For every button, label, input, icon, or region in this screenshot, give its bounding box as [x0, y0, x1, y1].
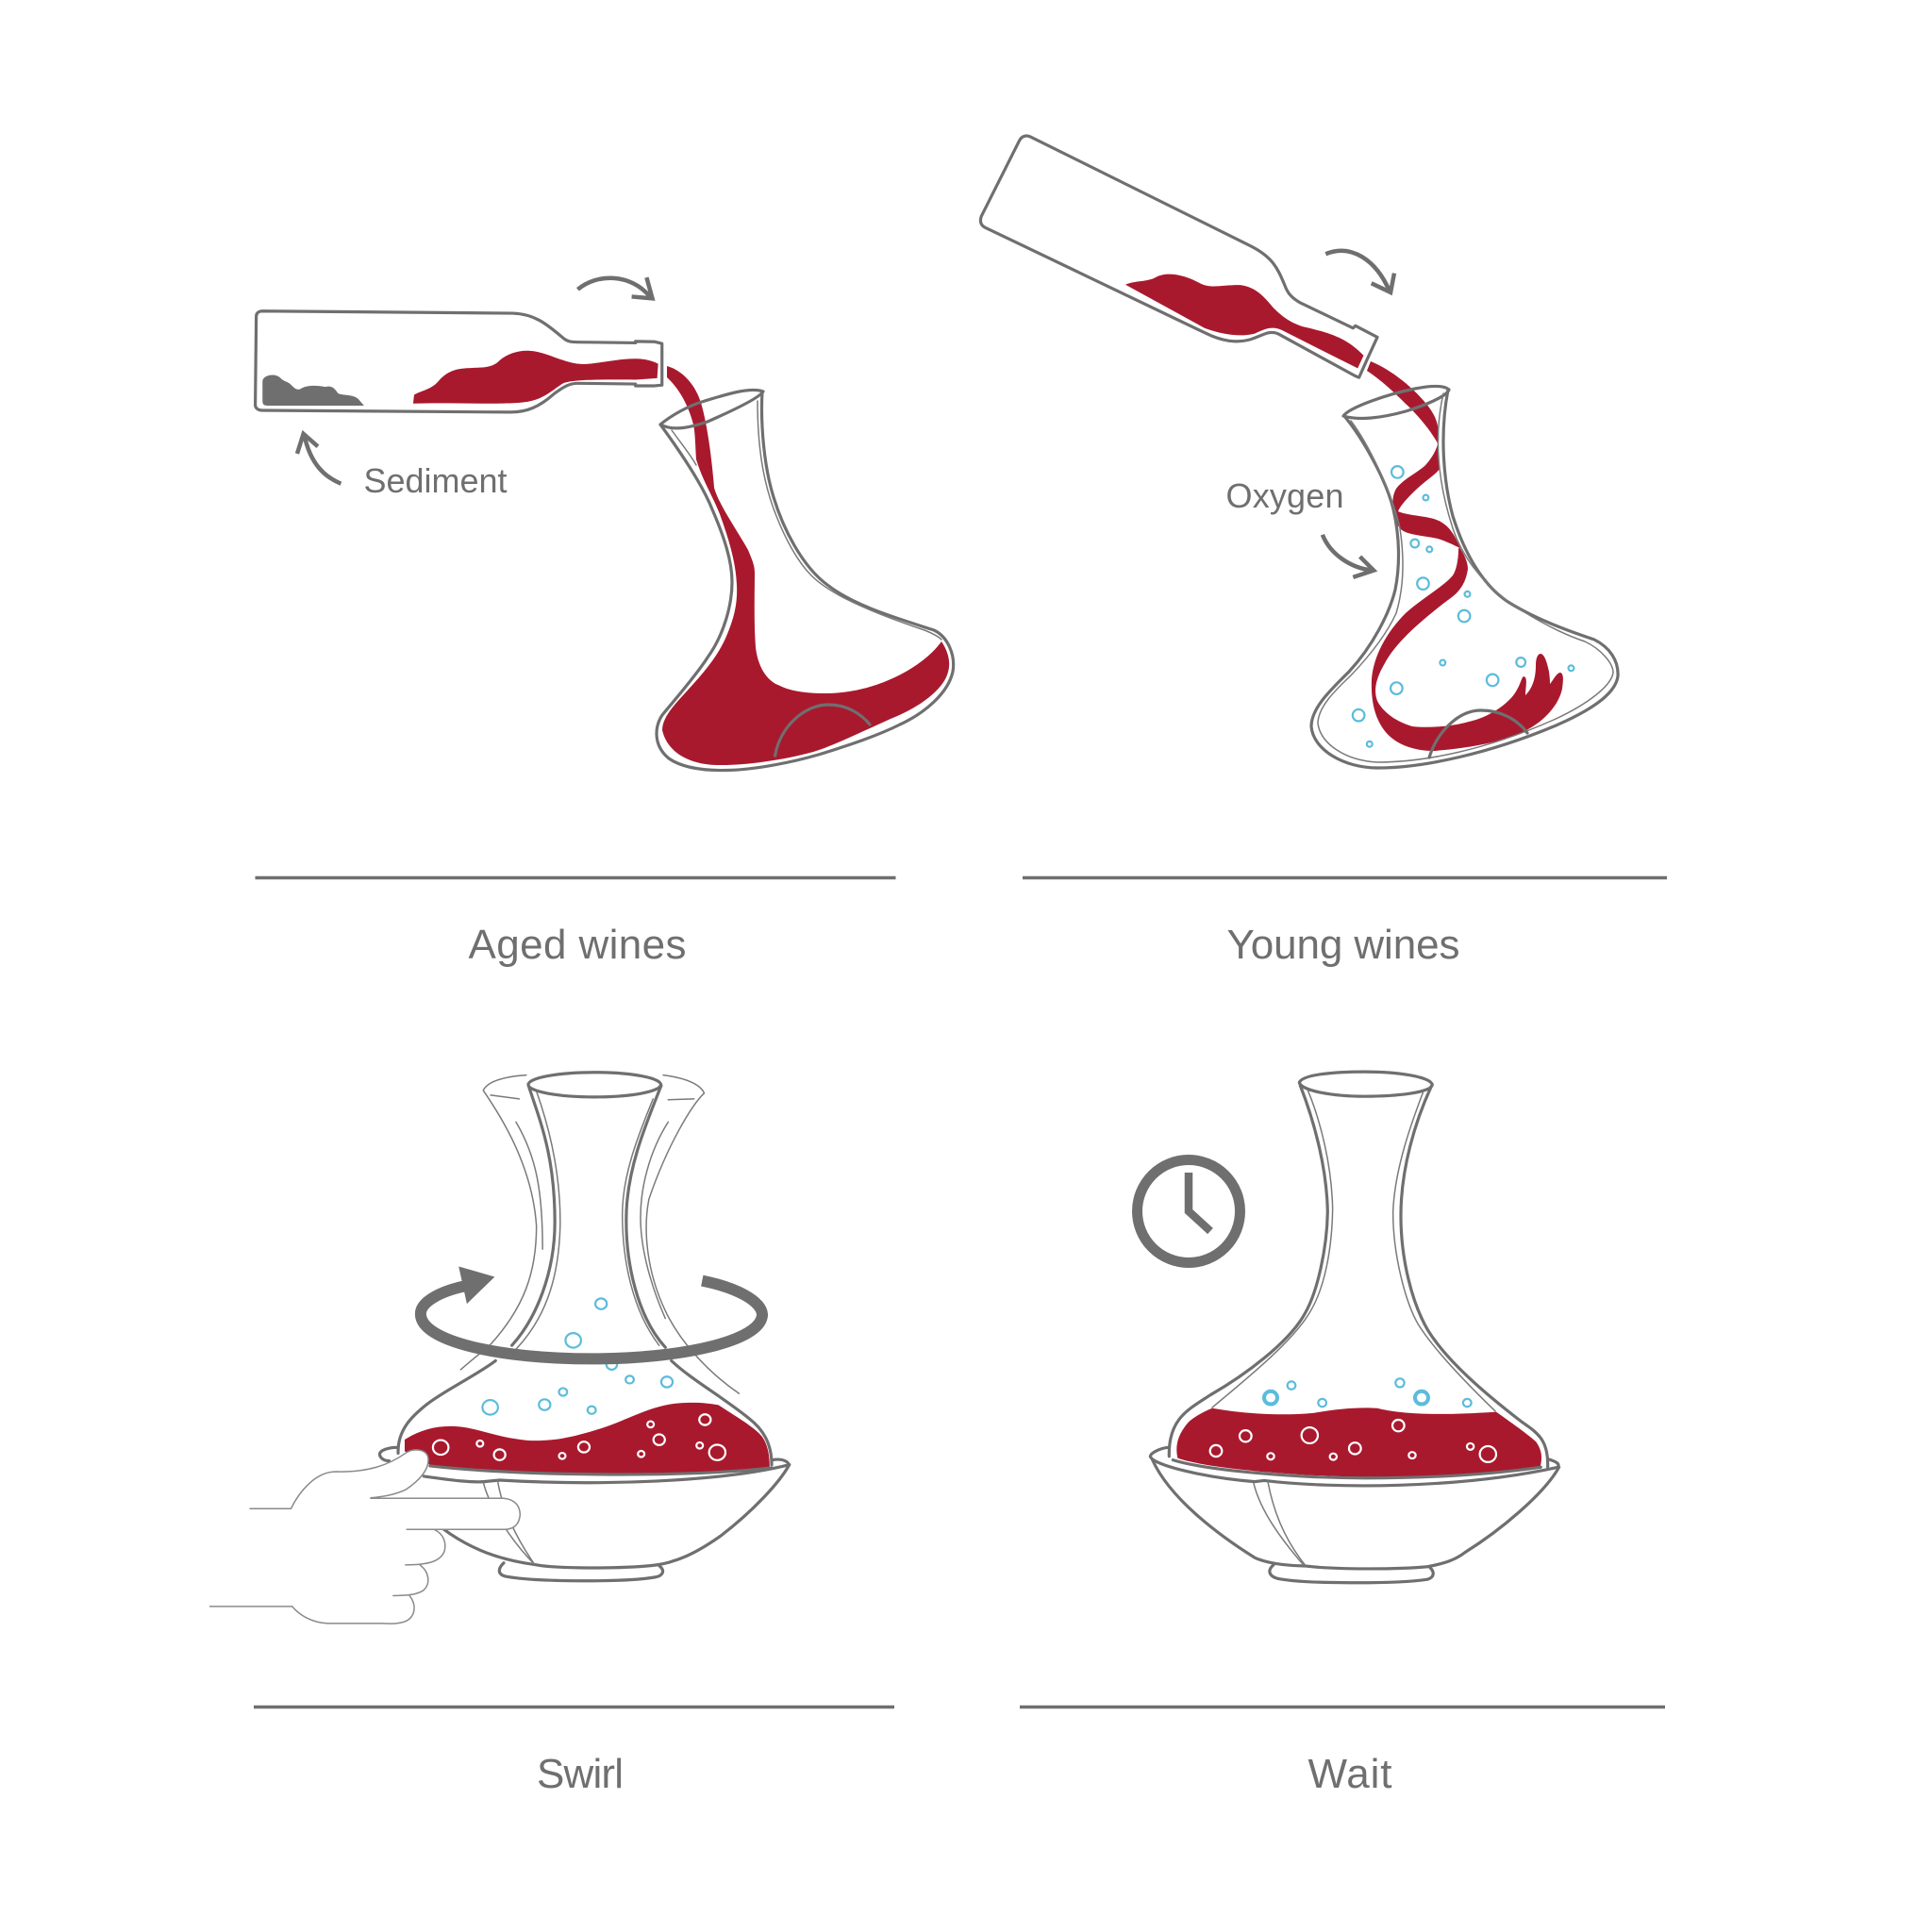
- decanter bowl base: [1150, 1447, 1559, 1583]
- decanter rim: [660, 390, 763, 428]
- decanter inner highlight: [672, 401, 941, 640]
- decanter outline: [657, 391, 954, 771]
- divider: swirl: [254, 1706, 894, 1708]
- panel: swirl: [210, 1073, 894, 1797]
- white bubbles in wine: [433, 1414, 725, 1460]
- decanter walls: [1169, 1086, 1548, 1467]
- blue bubbles: [482, 1298, 673, 1415]
- wine in bottle: [1125, 275, 1363, 368]
- decanter base punt: [775, 705, 870, 756]
- decanter rim: [1299, 1072, 1432, 1096]
- icon: clock: [1138, 1160, 1240, 1262]
- divider: wait: [1020, 1706, 1665, 1708]
- label: Sediment: Sediment: [364, 461, 508, 500]
- divider: young wines: [1023, 876, 1667, 879]
- label: Oxygen: Oxygen: [1226, 476, 1343, 515]
- bottle outline: [256, 311, 662, 412]
- arrow: tilt bottle: [1325, 251, 1394, 292]
- wine: [405, 1403, 770, 1475]
- wine stream and pool in decanter: [662, 366, 949, 765]
- wine ribbon: [1367, 361, 1563, 751]
- heading: Young wines: Young wines: [1226, 922, 1460, 968]
- divider: aged wines: [255, 876, 896, 879]
- decanter rim: [1343, 387, 1449, 418]
- blue bubbles: [1264, 1378, 1472, 1407]
- decanter outline: [1311, 390, 1618, 768]
- heading: Wait: Wait: [1307, 1751, 1392, 1797]
- arrow: tilt bottle: [577, 277, 653, 298]
- sediment: [262, 375, 364, 406]
- heading: Aged wines: Aged wines: [468, 922, 687, 968]
- heading: Swirl: Swirl: [537, 1751, 624, 1797]
- blue bubbles: [1353, 466, 1574, 747]
- ghost decanter left: [460, 1075, 542, 1370]
- white bubbles in wine: [1210, 1420, 1496, 1462]
- hand: [210, 1450, 520, 1624]
- decanter inner highlight: [1318, 393, 1613, 762]
- panel: young wines: [980, 136, 1667, 968]
- panel: aged wines: [255, 277, 954, 968]
- bottle outline: [980, 136, 1377, 377]
- ghost decanter right: [641, 1075, 739, 1393]
- swirl arrow: [421, 1266, 762, 1358]
- arrow: sediment: [297, 434, 341, 484]
- decanter rim: [528, 1073, 660, 1097]
- arrow: oxygen: [1323, 535, 1374, 577]
- wine: [1176, 1407, 1541, 1477]
- decanter bowl base: [379, 1447, 790, 1581]
- decanter main walls: [398, 1086, 772, 1465]
- wine in bottle: [413, 351, 658, 404]
- panel: wait: [1020, 1072, 1665, 1797]
- decanter base punt: [1429, 710, 1527, 758]
